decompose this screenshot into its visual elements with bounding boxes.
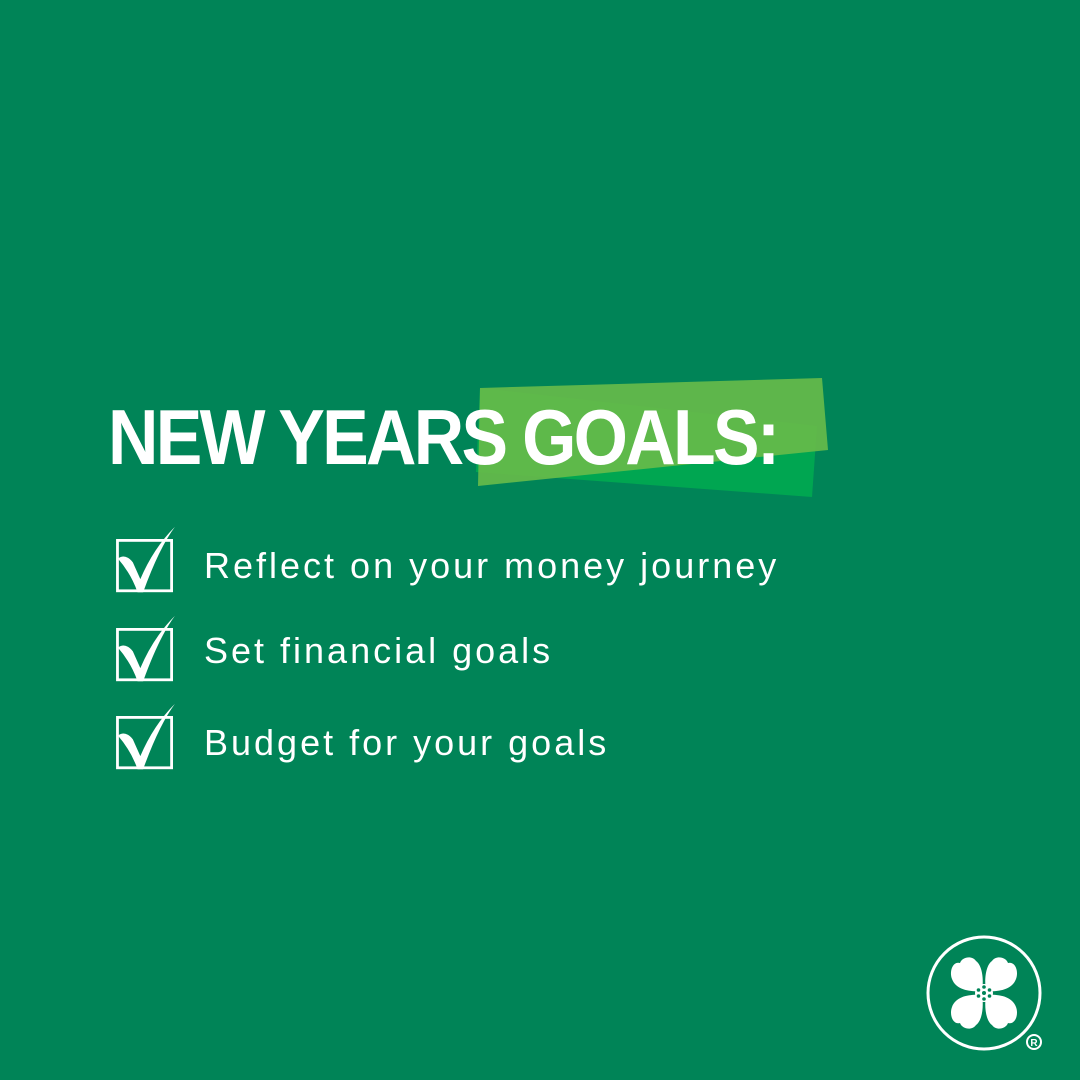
checklist item 1 xyxy=(116,527,779,592)
text: Set financial goals xyxy=(204,630,553,671)
logo: dogwood flower: R xyxy=(1030,1038,1038,1049)
icon: checkbox xyxy=(116,616,175,682)
text: Budget for your goals xyxy=(204,722,609,763)
text: Reflect on your money journey xyxy=(204,545,779,586)
icon: checkbox xyxy=(116,704,175,770)
logo: dogwood flower xyxy=(926,936,1042,1050)
checklist item 3 xyxy=(116,704,609,770)
title: NEW YEARS GOALS: xyxy=(108,393,777,481)
checklist item 2 xyxy=(116,616,553,682)
icon: checkbox xyxy=(116,527,175,592)
